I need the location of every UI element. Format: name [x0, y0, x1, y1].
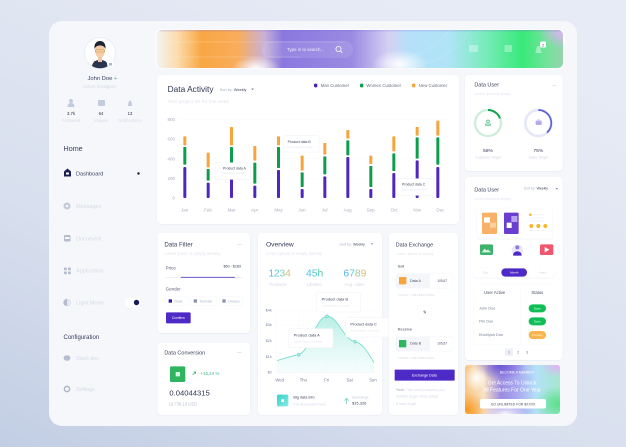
tooltip: product data c: Product data C	[350, 322, 377, 327]
stat: products	[268, 268, 291, 287]
stat: lifetime	[306, 268, 323, 287]
note: Ill have to get	[396, 402, 416, 406]
price slider	[166, 276, 242, 279]
swap button	[418, 305, 432, 319]
search bar	[262, 41, 353, 58]
icon: folder	[469, 45, 478, 52]
illustration: ui mockups	[477, 209, 552, 239]
panel: promo banner	[465, 365, 560, 414]
pagination	[505, 348, 528, 356]
line chart: $4k	[266, 309, 272, 313]
title: Data User	[474, 188, 499, 194]
sort control: Sort by: Weekly	[220, 88, 246, 92]
sell row	[396, 273, 453, 288]
receive row	[396, 336, 453, 351]
toggle switch	[125, 298, 141, 308]
icon: mail	[504, 45, 512, 52]
promo headline	[483, 380, 541, 394]
sell row: Data A	[410, 279, 422, 283]
promo eyebrow: BECOME A MEMBER	[500, 370, 535, 374]
note	[396, 388, 446, 406]
sell rate: 1 DATA = 7534 INFO DATA	[398, 293, 434, 297]
nav item: application	[64, 268, 103, 274]
exchange button: Exchange Data	[412, 374, 438, 378]
user table: User Active	[484, 290, 506, 295]
x axis: Sep	[367, 208, 375, 213]
line chart: Sun	[369, 377, 377, 382]
header banner	[157, 30, 563, 68]
spendings	[345, 395, 369, 406]
dashboard panel	[49, 21, 577, 426]
title: Data Exchange	[396, 242, 433, 248]
tooltip: product data c	[346, 318, 390, 337]
segment tabs: Yearly	[539, 271, 547, 275]
sell row: 105,67	[437, 279, 447, 283]
promo headline: Get Access To Unlock	[488, 380, 537, 386]
tooltip: product data b: Lorem Ipsum is simply	[322, 304, 350, 308]
gauge: customer target: Customer Target	[475, 156, 501, 160]
x axis	[181, 208, 445, 213]
x axis: Mar	[228, 208, 236, 213]
gauge: customer target: 58%	[483, 148, 494, 154]
tooltip: product data c: Product data C	[402, 183, 426, 187]
x axis: Jan	[181, 208, 189, 213]
spendings: $15,326	[352, 401, 367, 406]
user table	[474, 284, 555, 344]
subtitle: Lorem Ipsum is simply	[474, 92, 511, 96]
sell label: Sell	[398, 263, 404, 268]
panel: data user table	[465, 177, 563, 360]
legend: Women Customer	[366, 83, 402, 88]
user table: Done	[534, 319, 541, 323]
conversion value: 0.04044315	[169, 389, 210, 398]
panel: overview	[258, 233, 390, 415]
line chart: Sat	[347, 377, 354, 382]
pagination: 1	[508, 350, 510, 354]
stat: avg sales	[343, 268, 367, 287]
nav item: stack dev: Stack dev	[76, 356, 99, 362]
gauge: sales target	[525, 110, 551, 160]
nav item: messages: Messages	[76, 204, 102, 210]
nav item: light mode	[64, 299, 104, 306]
panel: data activity	[157, 75, 459, 224]
x axis: Nov	[413, 208, 422, 213]
pagination: 2	[517, 350, 519, 354]
gauge: sales target: Sales Target	[529, 156, 548, 160]
nav item: dashboard	[64, 168, 140, 178]
stat: images: 64	[99, 111, 104, 116]
user table: Status	[531, 290, 543, 295]
line chart: $0	[268, 371, 272, 375]
line chart: $2k	[266, 339, 272, 343]
profile name: John Doe +	[88, 76, 118, 82]
promo headline: All Features For One Year	[483, 388, 541, 394]
receive label: Receive	[398, 326, 413, 331]
gauge: sales target: 75%	[533, 148, 544, 154]
tooltip: product data b: Lorem Ipsum is simply	[288, 146, 313, 149]
gender label: Gender	[166, 286, 181, 291]
tooltip: product data a: Product data A	[223, 166, 247, 170]
nav item: document: Document	[76, 236, 102, 242]
subtitle: Lorem Ipsum is simply	[474, 197, 511, 201]
x axis: Jul	[322, 208, 328, 213]
line chart: Fri	[324, 377, 329, 382]
subtitle: Lorem Ipsum is simply	[396, 252, 434, 256]
segment tabs	[473, 268, 555, 278]
nav item: light mode: Light Mode	[76, 300, 104, 306]
x axis: May	[274, 208, 284, 213]
heading: configuration: Configuration	[64, 335, 99, 341]
menu dots: ···	[237, 350, 242, 355]
x axis: Feb	[204, 208, 212, 213]
price label: Price	[166, 265, 176, 270]
nav item: stack dev	[64, 355, 99, 362]
user table: Pending	[532, 333, 543, 337]
title: Data Filter	[164, 242, 193, 249]
tooltip: product data a	[288, 329, 333, 348]
user table: Khoiriyah Doe	[479, 333, 503, 337]
y axis	[168, 117, 176, 201]
sort control: Sort by: Weekly	[339, 242, 365, 246]
receive row: 105,67	[437, 342, 447, 346]
segment tabs: Day	[483, 271, 488, 275]
pagination: 3	[526, 350, 528, 354]
nav item: settings: Settings	[76, 387, 95, 393]
nav item: document	[64, 235, 102, 242]
tooltip: product data a: Lorem Ipsum is simply	[294, 339, 323, 343]
nav item: settings	[64, 386, 95, 393]
big data info: Big data info	[293, 396, 315, 400]
gender options: Unisex	[228, 300, 240, 304]
subtitle: Lorem Ipsum is simply dummy	[164, 251, 221, 256]
icon: video tile	[540, 244, 553, 255]
confirm button: Confirm	[172, 316, 185, 320]
stat: lifetime: 45h	[306, 268, 323, 279]
panel: data filter	[158, 233, 250, 333]
title: Data Conversion	[164, 351, 205, 357]
panel: data user targets	[465, 75, 563, 171]
panel: data exchange	[389, 233, 458, 415]
gauge: customer target	[475, 110, 501, 160]
subtitle: Lorem Ipsum is simply dummy	[266, 251, 323, 256]
profile role: UI/UX Designer	[83, 84, 117, 90]
title: Overview	[266, 242, 294, 249]
receive row: Data B	[410, 342, 422, 346]
big data info	[277, 395, 326, 407]
tooltip: product data b: Product data B	[288, 140, 311, 144]
x axis: Jun	[298, 208, 306, 213]
bars: man customer	[183, 157, 439, 198]
line chart: Wed	[275, 377, 285, 382]
stat: notifications	[118, 100, 142, 123]
stat: products: Products	[269, 282, 286, 287]
x axis: Dec	[436, 208, 445, 213]
icon: green tile	[170, 366, 185, 382]
x axis: Aug	[344, 208, 352, 213]
gender options: Male	[174, 300, 183, 304]
stat: products: 1234	[268, 268, 291, 279]
swap button: ⇅	[423, 309, 427, 314]
y axis: 200	[168, 176, 176, 181]
tooltip: product data c: Lorem Ipsum is simply	[351, 328, 379, 332]
big data info: Put description here	[293, 403, 326, 407]
menu dots: ···	[552, 82, 556, 87]
nav item: application: Application	[76, 268, 103, 274]
line chart: $3k	[266, 323, 272, 327]
icon: user tile	[512, 245, 523, 256]
exchange button	[395, 370, 455, 381]
icon: notification bell: 2	[542, 42, 545, 47]
panel: data conversion	[158, 343, 250, 415]
y axis: 800	[168, 117, 176, 122]
title: Data Activity	[168, 84, 214, 94]
panel: data filter: $60 - $189	[224, 265, 241, 269]
stat: avg sales: Avg. sales	[345, 282, 365, 287]
gender options	[166, 296, 243, 306]
tooltip: product data a	[215, 163, 250, 179]
tooltip: product data b	[283, 136, 319, 152]
legend: New Customer	[419, 83, 448, 88]
tooltip: product data a: Lorem Ipsum is simply	[221, 172, 246, 175]
growth badge: +16,24 %	[200, 371, 219, 376]
bars: new customer	[183, 121, 439, 171]
tooltip: product data b	[317, 293, 361, 312]
stat: lifetime: Lifetime	[307, 282, 322, 287]
tooltip: product data c: Lorem Ipsum is simply	[402, 189, 427, 192]
stat: images	[94, 100, 108, 123]
stat: followers	[62, 99, 80, 123]
stat: notifications: 13	[128, 111, 133, 116]
stat: followers: Followers	[62, 118, 80, 123]
line chart	[266, 309, 377, 382]
receive rate: 1 DATA = 7534 INFO DATA	[398, 356, 434, 360]
subtitle: Your project list for this week	[168, 99, 230, 105]
x axis: Oct	[391, 208, 398, 213]
y axis: 0	[172, 196, 175, 201]
search bar: Type in to search...	[287, 47, 324, 52]
nav item: dashboard: Dashboard	[76, 172, 103, 178]
line chart: $1k	[266, 355, 272, 359]
note: monthly target. Keep going!	[396, 395, 438, 399]
tooltip: product data a: Product data A	[294, 332, 320, 337]
note: *Note : You nearly reached your	[396, 388, 446, 392]
icon: notification bell	[535, 42, 546, 53]
stat: images: Images	[94, 118, 108, 123]
usd value: 19.736,10 USD	[169, 401, 197, 406]
heading: home: Home	[64, 144, 83, 153]
x axis: Apr	[251, 208, 259, 213]
bars: women customer	[183, 137, 439, 187]
stat: followers: 3.7k	[67, 111, 76, 116]
segment tabs: Month	[510, 271, 519, 275]
icon: image tile	[480, 244, 493, 255]
user table: Done	[534, 306, 541, 310]
tooltip: product data c	[398, 179, 433, 195]
sort control: Sort by: Weekly	[524, 187, 548, 191]
y axis: 600	[168, 137, 176, 142]
tooltip: product data b: Product data B	[322, 297, 348, 302]
spendings: Spendings	[352, 395, 369, 399]
sidebar	[62, 38, 142, 393]
user table: Flin Doe	[479, 320, 493, 324]
legend	[314, 83, 448, 88]
nav item: messages	[64, 202, 102, 210]
y axis: 400	[168, 156, 176, 161]
stat: avg sales: 6789	[343, 268, 367, 279]
title: Data User	[474, 83, 499, 89]
promo button: GO UNLIMITED FOR $XXXX	[491, 402, 536, 406]
icon: user avatar	[84, 38, 116, 68]
line chart: Thu	[300, 377, 308, 382]
user table: John Doe	[479, 307, 495, 311]
menu dots: ···	[237, 241, 242, 246]
gender options: Female	[200, 300, 212, 304]
stat: notifications: Notifications	[118, 118, 142, 123]
legend: Man Customer	[321, 83, 350, 88]
